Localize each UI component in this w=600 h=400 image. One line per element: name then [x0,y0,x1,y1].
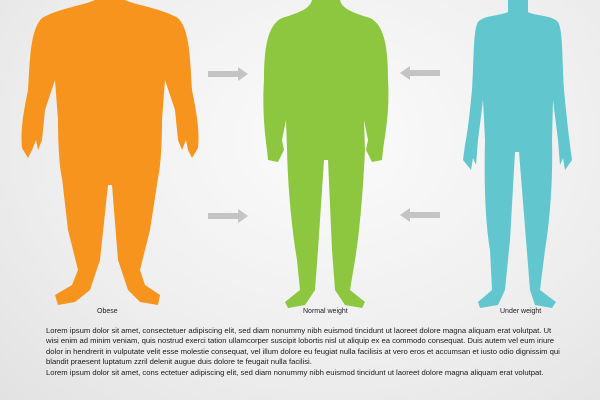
body text: blandit praesent luptatum zzril delenit augue duis dolore te feugait nulla facilisi. [46,357,312,366]
figure: normal weight [263,0,388,308]
figure: obese [21,0,199,305]
body text: Lorem ipsum dolor sit amet, consectetuer adipiscing elit, sed diam nonummy nibh euismod tincidunt ut laoreet dolore magna aliquam erat volutpat. Ut [46,326,551,335]
arrow: bottom right [400,208,440,222]
figure: under weight [463,0,572,308]
arrow: top right [400,66,440,80]
body text: dolor in hendrerit in vulputate velit esse molestie consequat, vel illum dolore eu feugiat nulla facilisis at vero eros et accumsan et iusto odio dignissim qui [46,347,560,356]
arrow: top left [208,67,248,81]
body text: Lorem ipsum dolor sit amet, cons ectetuer adipiscing elit, sed diam nonummy nibh euismod tincidunt ut laoreet dolore magna aliquam erat volutpat. [46,368,543,377]
body text: wisi enim ad minim veniam, quis nostrud exerci tation ullamcorper suscipit lobortis nisl ut aliquip ex ea commodo consequat. Duis autem vel eum iriure [46,336,554,345]
body text [46,326,560,377]
label: obese: Obese [97,308,118,315]
figures and arrows [21,0,572,308]
label: under weight: Under weight [500,308,541,315]
arrow: bottom left [208,209,248,223]
label: normal weight: Normal weight [303,308,348,315]
